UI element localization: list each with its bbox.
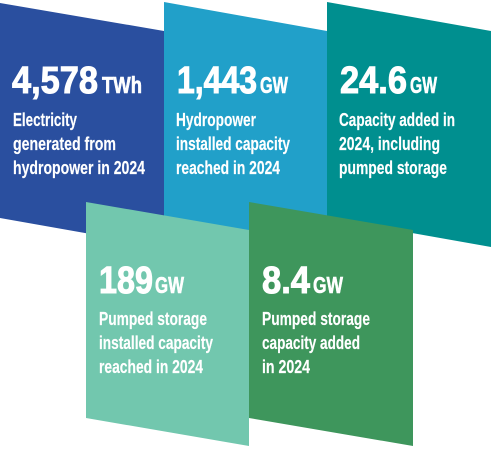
stat: 24.6 GW: 24.6 bbox=[340, 60, 407, 102]
description: electricity generated: generated from bbox=[13, 133, 116, 154]
description: pumped storage capacity added bbox=[262, 308, 370, 377]
panel: hydropower installed capacity bbox=[164, 2, 327, 247]
description: pumped storage installed capacity bbox=[99, 308, 214, 377]
stat: 4,578 TWh: TWh bbox=[102, 72, 142, 98]
stat: 8.4 GW: GW bbox=[313, 272, 343, 298]
stat: 189 GW: 189 bbox=[99, 260, 153, 302]
panel: capacity added bbox=[327, 2, 491, 247]
description: electricity generated: Electricity bbox=[13, 109, 78, 130]
stat: 4,578 TWh: 4,578 bbox=[12, 60, 98, 102]
description: pumped storage capacity added: in 2024 bbox=[262, 356, 311, 377]
description: pumped storage installed capacity: Pumped storage bbox=[99, 308, 207, 329]
description: hydropower installed capacity: installed capacity bbox=[176, 133, 291, 154]
description: pumped storage capacity added: Pumped storage bbox=[262, 308, 370, 329]
panel: pumped storage installed capacity bbox=[86, 202, 249, 446]
panel: pumped storage capacity added bbox=[249, 202, 413, 446]
description: hydropower installed capacity: Hydropower bbox=[176, 109, 256, 130]
stat: 189 GW: GW bbox=[155, 272, 184, 298]
stat: 24.6 GW: GW bbox=[410, 72, 437, 98]
stat: 1,443 GW: GW bbox=[260, 72, 288, 98]
stat: 1,443 GW: 1,443 bbox=[177, 60, 257, 102]
stat: 8.4 GW bbox=[262, 260, 343, 302]
description: capacity added: Capacity added in bbox=[339, 109, 455, 130]
description: capacity added bbox=[339, 109, 455, 178]
description: capacity added: 2024, including bbox=[339, 133, 440, 154]
description: hydropower installed capacity: reached in 2024 bbox=[176, 157, 281, 178]
description: electricity generated: hydropower in 2024 bbox=[13, 157, 146, 178]
description: pumped storage installed capacity: reached in 2024 bbox=[99, 356, 204, 377]
description: electricity generated bbox=[13, 109, 146, 178]
description: pumped storage installed capacity: installed capacity bbox=[99, 332, 214, 353]
description: pumped storage capacity added: capacity added bbox=[262, 332, 360, 353]
panel: electricity generated bbox=[0, 3, 164, 247]
description: hydropower installed capacity bbox=[176, 109, 291, 178]
stat: 8.4 GW: 8.4 bbox=[262, 260, 310, 302]
description: capacity added: pumped storage bbox=[339, 157, 447, 178]
